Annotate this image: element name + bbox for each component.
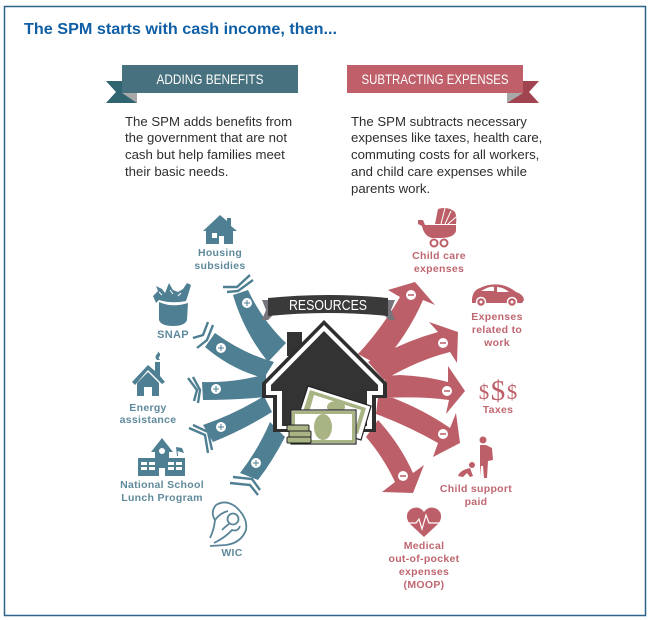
text: subtracting expenses: parents work. (351, 181, 430, 196)
text: subtracting expenses: expenses like taxes, health care, (351, 130, 542, 145)
text: adding benefits: their basic needs. (125, 164, 228, 179)
banner: resources: RESOURCES (289, 297, 367, 314)
label: SNAP: SNAP (157, 329, 189, 341)
icon: car (472, 284, 524, 306)
label: taxes: Taxes (483, 404, 513, 416)
label: medical out-of-pocket expenses: Medical (404, 540, 444, 552)
banner: subtracting expenses: SUBTRACTING EXPENSES (362, 71, 508, 87)
text: subtracting expenses: commuting costs for all workers, (351, 147, 539, 162)
icon: house with money (262, 320, 387, 444)
label: medical out-of-pocket expenses: (MOOP) (404, 579, 444, 591)
text: adding benefits: cash but help families meet (125, 147, 285, 162)
banner: subtracting expenses (347, 65, 539, 103)
text: adding benefits: the government that are not (125, 130, 287, 145)
icon: coin stack (287, 425, 311, 443)
label: child support paid: paid (465, 496, 487, 508)
icon: WIC mother and child (210, 502, 246, 546)
label: child support paid: Child support (440, 483, 512, 495)
icon: SNAP grocery bag (153, 283, 191, 326)
label: expenses related to work: work (483, 337, 510, 349)
label: energy assistance: assistance (120, 414, 176, 426)
label: medical out-of-pocket expenses: expenses (399, 566, 449, 578)
label: child care expenses: Child care (412, 250, 466, 262)
icon: parent and baby (458, 436, 493, 478)
icon: front bill (291, 410, 356, 444)
label: housing subsidies: subsidies (194, 260, 246, 272)
label: child care expenses: expenses (414, 263, 464, 275)
label: national school lunch program: National School (120, 479, 204, 491)
text: subtracting expenses: The SPM subtracts necessary (351, 114, 527, 129)
label: WIC: WIC (221, 547, 243, 559)
expense arrows (358, 282, 465, 493)
icon: dollar signs: $ (491, 375, 505, 407)
icon: stroller (418, 208, 456, 246)
icon: heart (406, 508, 441, 537)
text: subtracting expenses: and child care expenses while (351, 164, 527, 179)
banner: adding benefits: ADDING BENEFITS (156, 71, 264, 87)
label: housing subsidies: Housing (198, 247, 242, 259)
icon: back bill (297, 386, 371, 440)
label: medical out-of-pocket expenses: out-of-pocket (389, 553, 460, 565)
label: expenses related to work: Expenses (471, 311, 523, 323)
title: The SPM starts with cash income, then... (24, 21, 337, 38)
label: national school lunch program: Lunch Program (121, 492, 203, 504)
icon: dollar signs: $ (479, 380, 489, 404)
icon: energy assistance (132, 351, 165, 396)
benefit arrows (188, 275, 286, 495)
icon: dollar signs (479, 375, 517, 407)
label: expenses related to work: related to (472, 324, 522, 336)
text: adding benefits: The SPM adds benefits from (125, 114, 292, 129)
icon: national school (138, 438, 185, 476)
banner: resources (262, 295, 395, 320)
label: energy assistance: Energy (129, 402, 167, 414)
icon: housing subsidies (203, 215, 237, 244)
banner: adding benefits (106, 65, 298, 103)
icon: dollar signs: $ (507, 380, 517, 404)
